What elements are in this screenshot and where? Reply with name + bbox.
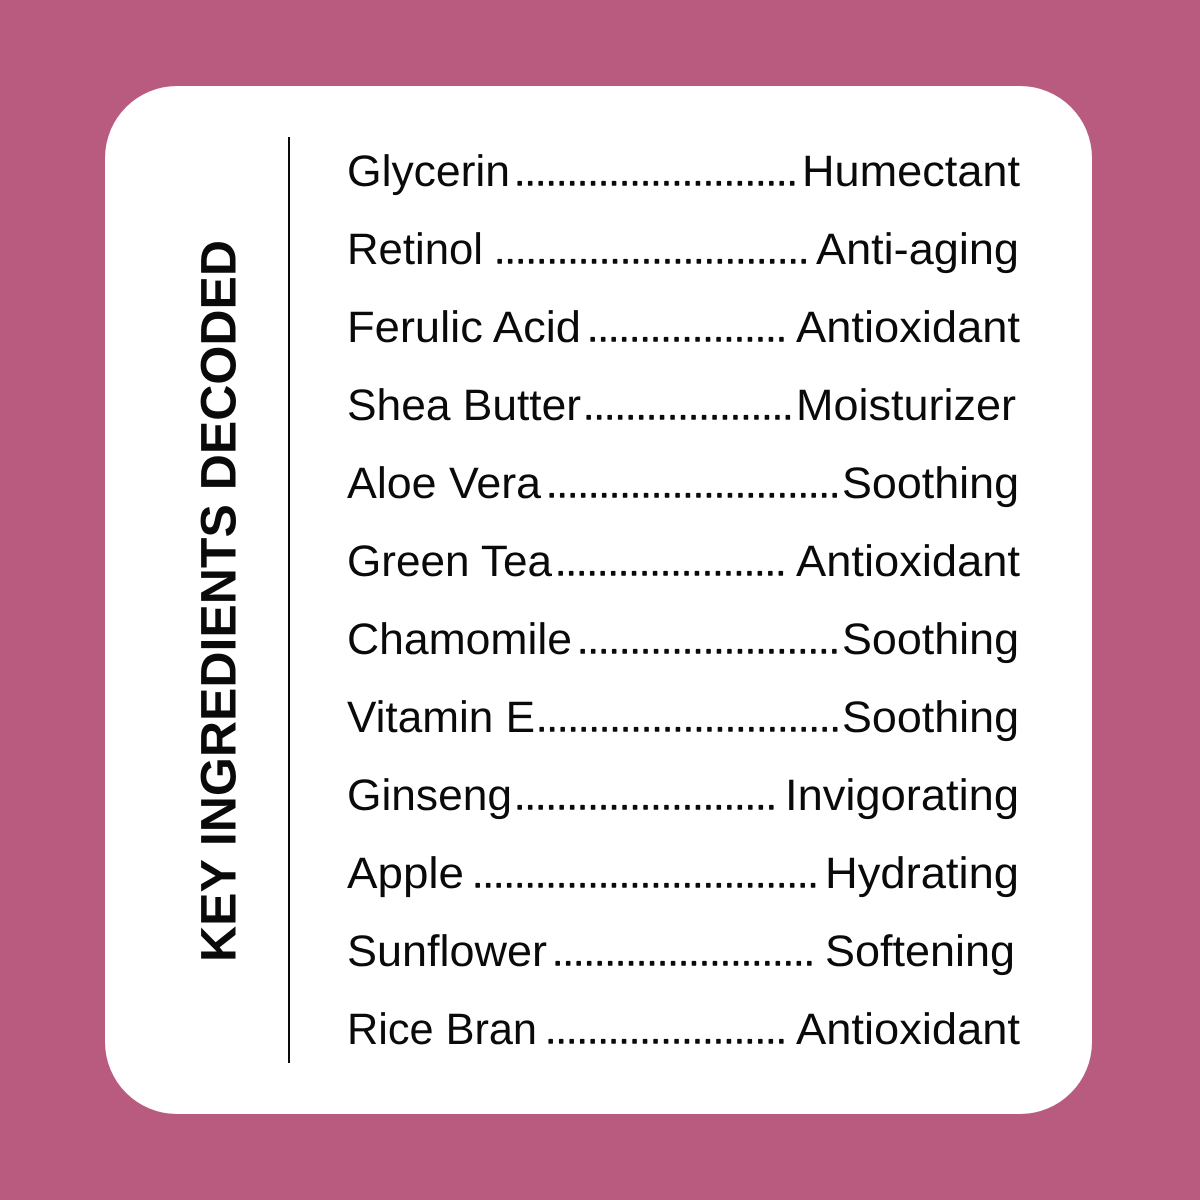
row: Apple: ................................. [473, 858, 819, 894]
row: Glycerin: Glycerin [347, 147, 510, 196]
row: Ginseng [347, 771, 1019, 820]
row: Ginseng: ......................... [515, 780, 777, 816]
row: Rice Bran: Rice Bran [347, 1005, 537, 1054]
row: Shea Butter: Shea Butter [347, 381, 581, 430]
row: Shea Butter: .................... [584, 390, 794, 426]
row: Green Tea: Green Tea [347, 537, 553, 586]
row: Retinol [347, 225, 1019, 274]
row: Ginseng: Ginseng [347, 771, 512, 820]
row: Sunflower: Sunflower [347, 927, 547, 976]
row: Ferulic Acid [347, 303, 1020, 352]
row: Chamomile: Chamomile [347, 615, 572, 664]
row: Ginseng: Invigorating [785, 771, 1019, 820]
row: Aloe Vera: ............................ [547, 468, 841, 504]
row: Apple: Apple [347, 849, 464, 898]
row: Sunflower [347, 927, 1015, 976]
row: Vitamin E: Vitamin E [347, 693, 535, 742]
row: Ferulic Acid: Ferulic Acid [347, 303, 581, 352]
row: Aloe Vera [347, 459, 1019, 508]
row: Chamomile: Soothing [842, 615, 1019, 664]
row: Rice Bran: Antioxidant [796, 1005, 1020, 1054]
title: key ingredients decoded: KEY INGREDIENTS DECODED [190, 240, 246, 962]
row: Green Tea [347, 537, 1020, 586]
row: Sunflower: ......................... [553, 936, 815, 972]
row: Shea Butter: Moisturizer [796, 381, 1016, 430]
row: Rice Bran [347, 1005, 1020, 1054]
row: Apple: Hydrating [825, 849, 1019, 898]
row: Chamomile: ......................... [578, 624, 840, 660]
row: Sunflower: Softening [825, 927, 1015, 976]
row: Green Tea: ...................... [556, 546, 787, 582]
row: Glycerin: Humectant [802, 147, 1020, 196]
row: Chamomile [347, 615, 1019, 664]
row: Shea Butter [347, 381, 1016, 430]
row: Apple [347, 849, 1019, 898]
row: Vitamin E: Soothing [842, 693, 1019, 742]
row: Retinol: Retinol [347, 225, 483, 274]
row: Vitamin E [347, 693, 1019, 742]
panel: white card [105, 86, 1092, 1114]
row: Aloe Vera: Aloe Vera [347, 459, 542, 508]
row: Retinol: Anti-aging [816, 225, 1019, 274]
row: Rice Bran: ....................... [546, 1014, 787, 1050]
row: Vitamin E: ............................. [537, 702, 841, 738]
row: Retinol: .............................. [495, 234, 810, 270]
vertical divider [288, 137, 290, 1063]
ingredient list [347, 147, 1020, 1054]
row: Glycerin: ........................... [515, 156, 798, 192]
row: Aloe Vera: Soothing [842, 459, 1019, 508]
row: Glycerin [347, 147, 1020, 196]
row: Ferulic Acid: Antioxidant [796, 303, 1020, 352]
row: Ferulic Acid: ................... [588, 312, 787, 348]
row: Green Tea: Antioxidant [796, 537, 1020, 586]
